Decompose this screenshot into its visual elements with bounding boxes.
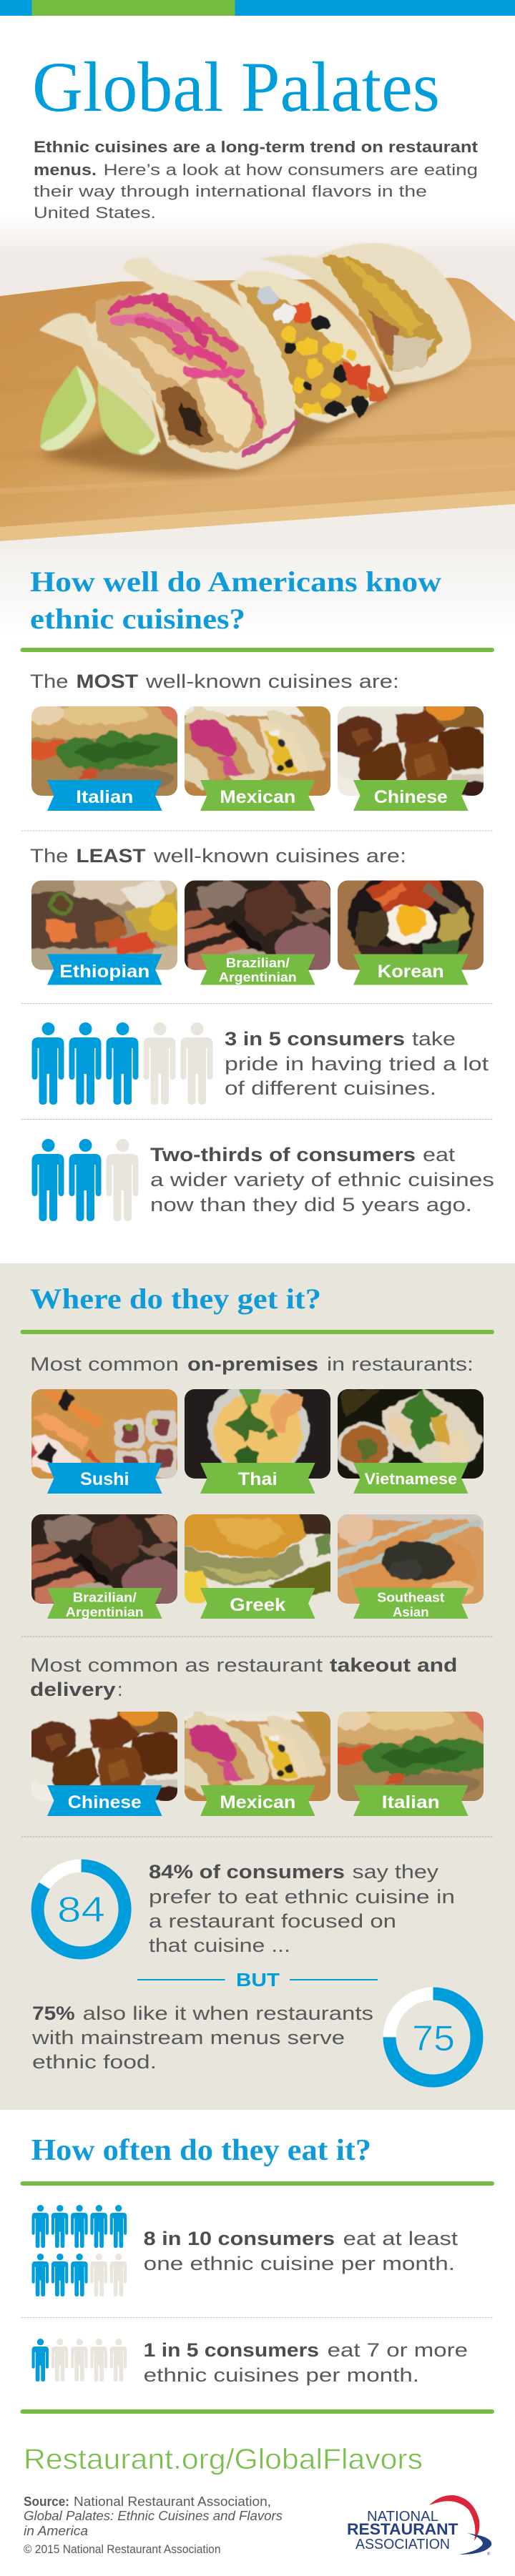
stat: two-thirds of consumers: Two-thirds of consumers [150, 1144, 416, 1165]
subheading: takeout and delivery: delivery [30, 1679, 116, 1700]
card: Brazilian/Argentinian: Argentinian [219, 970, 297, 984]
card: Korean: Korean [378, 962, 444, 982]
logo: National Restaurant Association: ASSOCIATION [355, 2537, 450, 2552]
card: Italian: Italian [76, 787, 133, 807]
stat: 1 in 5 consumers: eat 7 or more [328, 2339, 468, 2361]
subheading: least well-known: well-known cuisines are: [153, 845, 406, 867]
heading: how often do they eat it [20, 2134, 494, 2186]
subheading: on-premises: in restaurants: [327, 1353, 474, 1375]
card: Vietnamese: Vietnamese [365, 1470, 457, 1488]
stat: 3 in 5 consumers: take [412, 1028, 456, 1050]
stat: two-thirds of consumers: now than they did 5 years ago. [150, 1194, 472, 1215]
subheading: most well-known: The [30, 671, 69, 692]
source note: in America [24, 2524, 88, 2538]
stat: 84% of consumers: 84% of consumers [149, 1861, 345, 1882]
intro text: United States. [34, 204, 156, 222]
card: Mexican: Mexican [220, 1792, 295, 1812]
card: Mexican: Mexican [220, 787, 295, 807]
card: Chinese [338, 706, 484, 811]
subheading: most well-known [30, 671, 399, 692]
card: Thai: Thai [238, 1469, 278, 1489]
stat: 84% of consumers: a restaurant focused on [149, 1910, 396, 1932]
card: Chinese: Chinese [68, 1792, 142, 1812]
donut chart: 84 [38, 1866, 125, 1953]
donut chart: 75 [389, 1993, 476, 2081]
stat: two-thirds of consumers [150, 1144, 494, 1215]
stat: 84% of consumers: prefer to eat ethnic cuisine in [149, 1886, 455, 1908]
stat: 8 in 10 consumers: eat at least [343, 2228, 458, 2249]
donut chart: 75: 75 [412, 2018, 455, 2058]
intro text: their way through international flavors in the [34, 182, 427, 200]
stat: 75% also like it: with mainstream menus serve [31, 2027, 345, 2048]
intro text [34, 138, 479, 222]
stat: 75% also like it: 75% [32, 2003, 75, 2024]
subheading: most well-known: well-known cuisines are: [145, 671, 399, 692]
website link: Restaurant.org/GlobalFlavors [24, 2444, 423, 2475]
card: Sushi: Sushi [80, 1469, 129, 1489]
logo: National Restaurant Association: ® [487, 2552, 491, 2557]
front taco [39, 257, 295, 470]
subheading: takeout and delivery [30, 1654, 458, 1700]
subheading: on-premises [30, 1353, 474, 1375]
logo: National Restaurant Association: NATIONAL [367, 2509, 438, 2525]
heading: how well do Americans know ethnic cuisines: ethnic cuisines? [30, 603, 245, 635]
stat: 3 in 5 consumers: of different cuisines. [225, 1077, 436, 1099]
pictogram: 3 in 5 people [31, 1022, 213, 1105]
heading: how often do they eat it: How often do they eat it? [31, 2134, 371, 2167]
card: Korean [338, 881, 484, 985]
heading: how well do Americans know ethnic cuisines: How well do Americans know [30, 566, 441, 598]
stat: 84% of consumers: that cuisine ... [149, 1935, 290, 1956]
middle taco [230, 271, 390, 423]
subheading: takeout and delivery: Most common as restaurant [30, 1654, 323, 1676]
card: Brazilian/Argentinian [181, 877, 334, 985]
card: Sushi [28, 1386, 181, 1494]
stat: 1 in 5 consumers: 1 in 5 consumers [144, 2339, 319, 2361]
card: Mexican [181, 1708, 334, 1816]
subheading: least well-known: LEAST [76, 845, 146, 867]
intro text: menus. [34, 161, 97, 179]
heading: where do they get it [20, 1283, 494, 1334]
card: Brazilian/Argentinian: Argentinian [66, 1605, 144, 1619]
subheading: takeout and delivery: : [117, 1679, 123, 1700]
card: Ethiopian [28, 877, 182, 985]
stat: 1 in 5 consumers: ethnic cuisines per month. [144, 2364, 419, 2386]
subheading: on-premises: on-premises [187, 1353, 318, 1375]
source note: Global Palates: Ethnic Cuisines and Flavors [24, 2509, 283, 2523]
donut chart: 84: 84 [57, 1890, 105, 1930]
stat: two-thirds of consumers: a wider variety of ethnic cuisines [150, 1169, 494, 1190]
source note: © 2015 National Restaurant Association [24, 2543, 220, 2556]
pictogram: 8 in 10 people [31, 2205, 127, 2296]
stat: 8 in 10 consumers: one ethnic cuisine per month. [144, 2253, 455, 2274]
stat: 3 in 5 consumers: pride in having tried a lot [225, 1053, 489, 1075]
stat: 75% also like it [31, 2003, 373, 2073]
stat: 75% also like it: also like it when restaurants [83, 2003, 373, 2024]
top colour bar [0, 0, 515, 16]
title: Global Palates [32, 47, 440, 127]
logo: National Restaurant Association: RESTAURANT [347, 2520, 458, 2538]
stat: 84% of consumers: say they [352, 1861, 439, 1882]
card: Italian: Italian [382, 1792, 440, 1812]
heading: how well do Americans know ethnic cuisines [20, 566, 494, 652]
card: Greek [181, 1511, 334, 1619]
source note: Source: [24, 2494, 69, 2509]
heading: where do they get it: Where do they get it? [30, 1283, 321, 1315]
card: Chinese: Chinese [374, 787, 448, 807]
hero photo: tacos on a wooden board [0, 212, 515, 636]
card: Thai [185, 1389, 330, 1494]
source note: National Restaurant Association, [74, 2494, 271, 2509]
card: Italian [333, 1707, 487, 1816]
subheading: on-premises: Most common [30, 1353, 179, 1375]
stat: 75% also like it: ethnic food. [32, 2051, 157, 2073]
card: Ethiopian: Ethiopian [59, 962, 149, 982]
card: Brazilian/Argentinian: Brazilian/ [73, 1590, 137, 1604]
intro text: Ethnic cuisines are a long-term trend on restaurant [34, 138, 479, 156]
subheading: most well-known: MOST [76, 671, 139, 692]
subheading: least well-known [30, 845, 406, 867]
stat: 8 in 10 consumers [144, 2228, 458, 2274]
source note [24, 2494, 283, 2556]
stat: two-thirds of consumers: eat [423, 1144, 456, 1165]
card: Southeast Asian: Southeast [377, 1590, 444, 1604]
card: Brazilian/Argentinian: Brazilian/ [226, 956, 290, 970]
pictogram: 1 in 5 people [31, 2339, 127, 2382]
logo: National Restaurant Association [347, 2495, 491, 2557]
card: Mexican [181, 703, 334, 811]
card: Brazilian/Argentinian [28, 1511, 181, 1619]
card: Southeast Asian [334, 1511, 487, 1619]
back taco [260, 243, 471, 385]
card: Greek: Greek [230, 1595, 285, 1615]
pictogram: two of three people [31, 1139, 139, 1221]
stat: 3 in 5 consumers [225, 1028, 489, 1099]
stat: 3 in 5 consumers: 3 in 5 consumers [225, 1028, 405, 1050]
card: Southeast Asian: Asian [393, 1605, 429, 1619]
divider: BUT: BUT [236, 1969, 280, 1990]
intro text: Here’s a look at how consumers are eating [104, 161, 478, 179]
stat: 8 in 10 consumers: 8 in 10 consumers [144, 2228, 335, 2249]
stat: 84% of consumers [149, 1861, 455, 1956]
stat: 1 in 5 consumers [144, 2339, 468, 2386]
card: Italian [27, 702, 181, 811]
panel: where do they get it [0, 1263, 515, 2110]
card: Vietnamese [334, 1386, 487, 1494]
subheading: least well-known: The [30, 845, 69, 867]
subheading: takeout and delivery: takeout and [330, 1654, 458, 1676]
card: Chinese [31, 1712, 177, 1816]
